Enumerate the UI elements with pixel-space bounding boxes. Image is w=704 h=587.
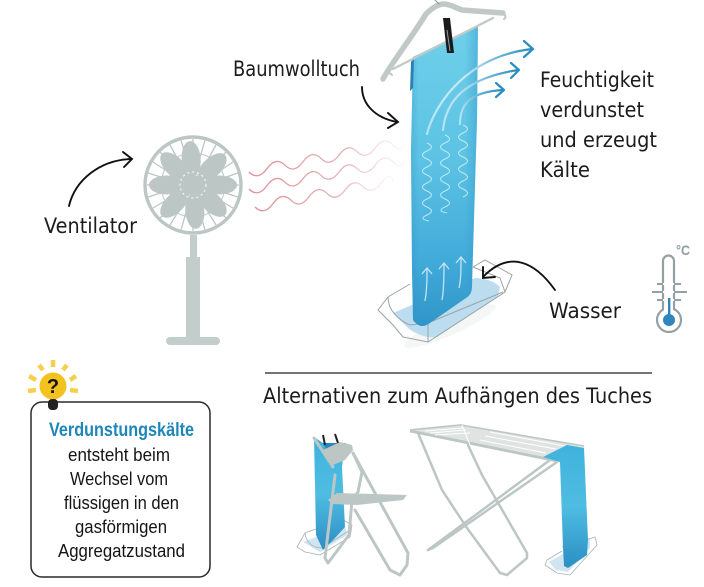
hanger bbox=[383, 0, 505, 79]
divider bbox=[265, 372, 652, 374]
thermometer icon bbox=[652, 242, 690, 332]
clips bbox=[323, 434, 338, 445]
tray shadow bbox=[401, 297, 499, 355]
tray bbox=[545, 537, 597, 575]
fan blades bbox=[149, 140, 237, 230]
info text: flüssigen in den bbox=[64, 492, 179, 513]
icon: light bulb: ? bbox=[47, 376, 59, 398]
icon: light bulb bbox=[28, 360, 78, 410]
clothes peg bbox=[443, 18, 454, 53]
label: Feuchtigkeit verdunstet und erzeugt Kälte: Kälte bbox=[540, 158, 590, 182]
fan stand bbox=[166, 235, 220, 345]
towel bbox=[314, 437, 345, 550]
info text: entsteht beim bbox=[68, 444, 170, 465]
arrow: Baumwolltuch bbox=[362, 87, 398, 128]
fan cage bbox=[145, 137, 241, 233]
tray bbox=[297, 520, 352, 555]
label: Wasser: Wasser bbox=[549, 299, 621, 323]
water bbox=[393, 278, 500, 337]
rack legs bbox=[418, 433, 557, 575]
chair seat bbox=[328, 493, 407, 505]
warm air waves bbox=[249, 141, 405, 211]
label: Baumwolltuch: Baumwolltuch bbox=[233, 57, 360, 81]
info text bbox=[58, 444, 185, 561]
info text: gasförmigen bbox=[75, 516, 167, 537]
heading: alternatives: Alternativen zum Aufhängen des Tuches bbox=[263, 384, 652, 408]
chair with towel bbox=[297, 434, 408, 575]
evaporation arrows bbox=[427, 41, 533, 134]
towel body bbox=[411, 25, 478, 326]
degree label: °C bbox=[676, 242, 690, 258]
tray outline bbox=[378, 260, 512, 342]
arrow: Wasser bbox=[483, 262, 555, 290]
towel fold bbox=[410, 58, 414, 91]
info text: Aggregatzustand bbox=[58, 540, 185, 561]
fan bbox=[145, 137, 241, 345]
label: Ventilator: Ventilator bbox=[44, 214, 137, 238]
info heading: Verdunstungskälte bbox=[49, 420, 194, 441]
chair back bbox=[323, 442, 353, 465]
rising water arrows bbox=[422, 257, 466, 301]
arrow: Ventilator bbox=[69, 152, 132, 206]
label: Feuchtigkeit verdunstet und erzeugt Kälte bbox=[540, 68, 657, 182]
label: Feuchtigkeit verdunstet und erzeugt Kälte: verdunstet bbox=[540, 98, 644, 122]
rack top bbox=[410, 424, 585, 462]
label: Feuchtigkeit verdunstet und erzeugt Kälte: Feuchtigkeit bbox=[540, 68, 654, 92]
chair frame bbox=[314, 438, 408, 575]
info text: Wechsel vom bbox=[70, 468, 168, 489]
label: Feuchtigkeit verdunstet und erzeugt Kälte: und erzeugt bbox=[540, 128, 657, 152]
drying rack with towel bbox=[410, 424, 597, 575]
water tray bbox=[378, 260, 512, 355]
towel bbox=[543, 445, 588, 568]
steam squiggles bbox=[422, 125, 468, 221]
cotton towel bbox=[410, 25, 478, 326]
info box bbox=[31, 402, 210, 577]
